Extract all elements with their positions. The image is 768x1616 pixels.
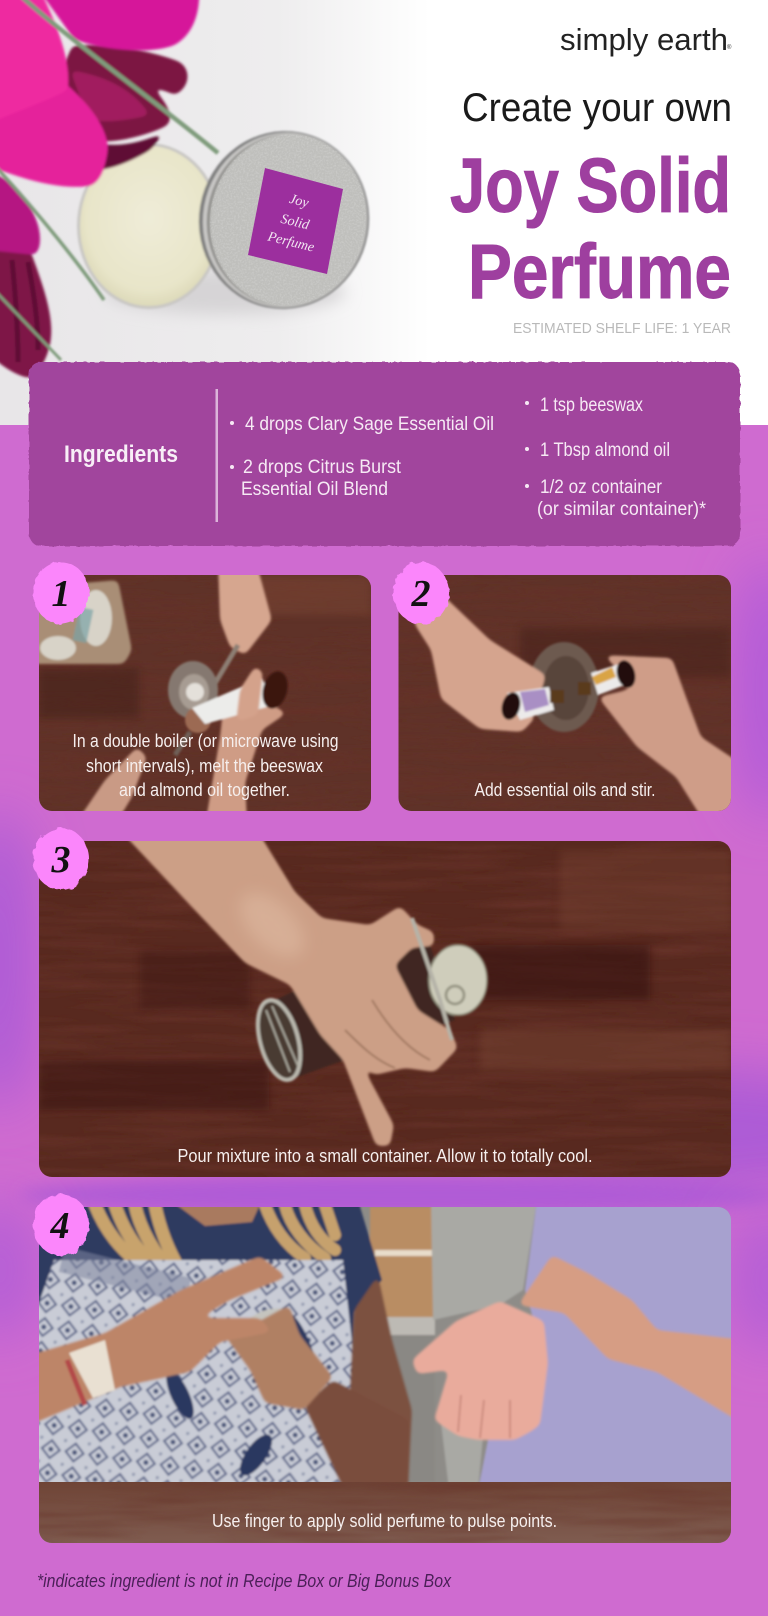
kitchen backdrop: [368, 1207, 436, 1336]
soft shadow under tin: [105, 270, 345, 314]
badge: step 2: [393, 562, 449, 624]
wooden table with caption: [39, 1482, 731, 1543]
small jar: [252, 1308, 282, 1320]
ingredient list column one: [230, 414, 494, 500]
upper hand with spoon: [214, 575, 272, 684]
smartwatch and bracelet: [67, 1340, 115, 1405]
ingredients heading: Ingredients: [64, 441, 178, 468]
purple lid label: Solid: [279, 212, 312, 234]
beeswax bag: [25, 580, 132, 664]
woman one raised hand and arm: [30, 1256, 287, 1425]
woman two grey cardigan: [431, 1200, 537, 1490]
clary sage bottle: [499, 687, 564, 722]
step 1 caption: [72, 731, 338, 800]
tin lid: [198, 130, 370, 310]
woman one dark arm: [345, 1275, 412, 1492]
badge: step 3: [33, 828, 89, 890]
purple lid label: Perfume: [265, 229, 316, 256]
registered mark: ®: [727, 44, 732, 51]
tin with cream balm: [77, 143, 221, 309]
glass jar: [250, 930, 487, 1085]
magenta flower petals: [0, 0, 199, 255]
right hand: [600, 654, 731, 811]
panel: ingredients: [29, 362, 740, 546]
badge: step 1: [33, 562, 89, 624]
ingredients divider: [216, 389, 218, 522]
product photo: flowers and open tin: [0, 0, 768, 425]
ingredient list column one: 4 drops Clary Sage Essential Oil: [245, 414, 494, 435]
lid metal texture: [210, 134, 366, 306]
shelf life note: ESTIMATED SHELF LIFE: 1 YEAR: [513, 320, 731, 337]
blonde hair: [87, 1207, 343, 1262]
essential oil bottle: [192, 669, 292, 724]
ingredient list column one: Essential Oil Blend: [241, 479, 388, 500]
applying hand: [518, 1255, 745, 1425]
woman one navy shirt: [39, 1207, 383, 1342]
open palm with fingers: [412, 1301, 548, 1440]
badge: step 4: [33, 1194, 89, 1256]
ingredient list column one: 2 drops Citrus Burst: [243, 457, 402, 478]
jar rim over hand: [412, 918, 452, 1040]
ingredient list column two: [525, 395, 707, 520]
woman one forearm: [304, 1380, 352, 1482]
patterned blouse: [30, 1247, 355, 1490]
step 2 caption: Add essential oils and stir.: [474, 780, 656, 800]
logo: simply earth: simply earth: [560, 22, 728, 57]
badge: step 3: 3: [50, 839, 70, 881]
purple page background: [0, 425, 768, 1616]
badge: step 1: 1: [52, 573, 70, 615]
panel: step 1 photo: [39, 575, 371, 811]
title: Create your own: Create your own: [462, 86, 732, 130]
purple lid label: Joy: [288, 192, 311, 211]
double boiler dish: [168, 661, 218, 755]
step 3 caption: Pour mixture into a small container. Allow it to totally cool.: [178, 1146, 592, 1166]
maroon flower petals: [0, 45, 188, 378]
ingredient list column two: (or similar container)*: [537, 499, 707, 520]
step 1 caption: short intervals), melt the beeswax: [86, 756, 323, 776]
purple lid label: [248, 168, 343, 274]
panel: step 2 photo: [398, 575, 731, 811]
footnote: *indicates ingredient is not in Recipe Box or Big Bonus Box: [37, 1571, 452, 1591]
woman one lower hand: [225, 1305, 333, 1410]
ingredient list column two: 1 Tbsp almond oil: [540, 440, 670, 461]
badge: step 2: 2: [410, 573, 430, 615]
metal tray: [529, 642, 599, 732]
badge: step 4: 4: [50, 1205, 70, 1247]
neck: [176, 1207, 260, 1228]
step 1 caption: In a double boiler (or microwave using: [72, 731, 338, 751]
hand holding bottle: [206, 682, 284, 811]
lower hands: [82, 748, 148, 811]
ingredient list column two: 1 tsp beeswax: [540, 395, 643, 416]
left hand: [413, 598, 546, 734]
wooden table with caption: Use finger to apply solid perfume to pulse points.: [212, 1511, 557, 1531]
citrus burst bottle: [578, 658, 638, 695]
green leaves: [0, 0, 218, 360]
panel: step 4 photo: [30, 1200, 745, 1543]
hand gripping jar and pointing finger: [115, 825, 458, 1146]
title: Perfume: Perfume: [468, 229, 731, 315]
ingredient list column two: 1/2 oz container: [540, 477, 663, 498]
woman two lavender shirt: [478, 1200, 740, 1490]
step 1 caption: and almond oil together.: [119, 780, 290, 800]
panel: step 3 photo: [39, 825, 731, 1177]
